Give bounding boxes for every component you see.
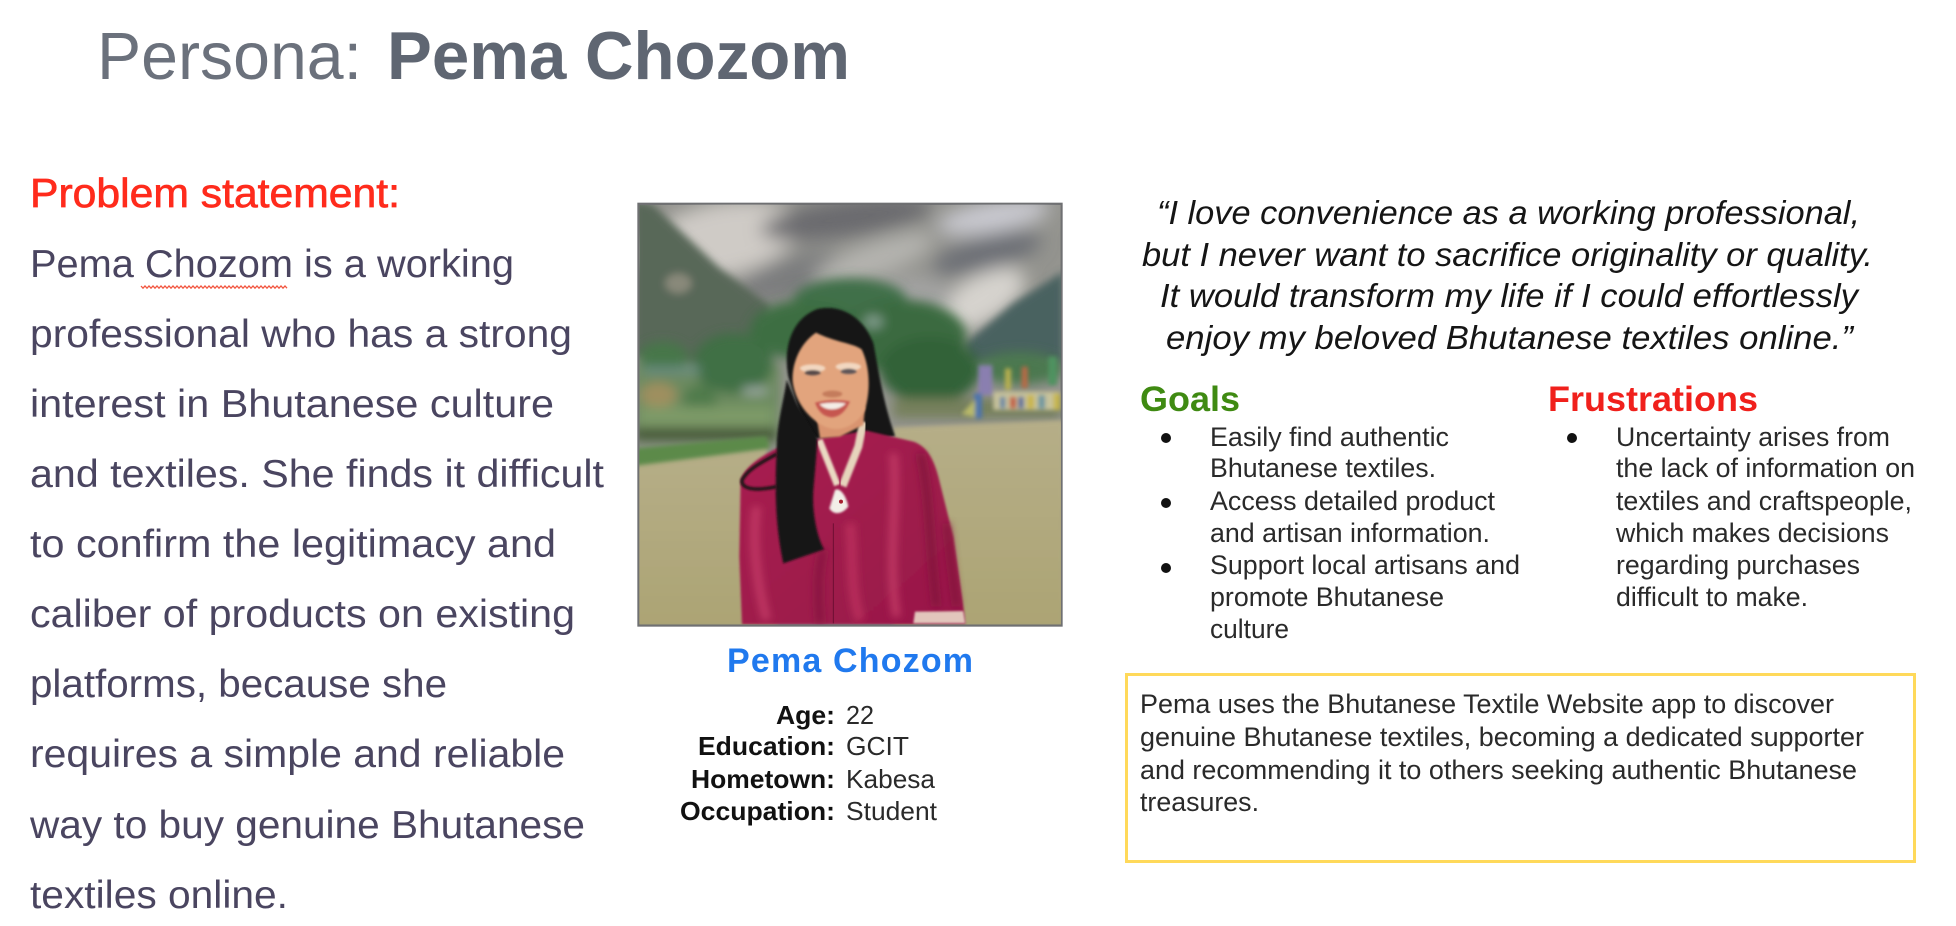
persona details	[680, 700, 938, 826]
persona details: Age:	[776, 700, 835, 730]
panel: goals	[1140, 380, 1520, 644]
problem statement paragraph: and textiles. She finds it difficult	[30, 453, 604, 496]
problem statement paragraph: caliber of products on existing	[30, 593, 575, 636]
persona details: Student	[846, 796, 938, 826]
goals bullet list: promote Bhutanese	[1210, 582, 1444, 612]
mountains	[633, 200, 1063, 367]
collar	[819, 440, 837, 485]
scenario text: treasures.	[1140, 787, 1259, 817]
frustrations bullet list: difficult to make.	[1616, 582, 1808, 612]
portrait photo	[633, 188, 1063, 627]
persona details: Hometown:	[691, 764, 835, 794]
frustrations bullet list	[1567, 422, 1915, 612]
goals bullet list: and artisan information.	[1210, 518, 1490, 548]
scenario text: genuine Bhutanese textiles, becoming a dedicated supporter	[1140, 722, 1864, 752]
cuff	[913, 611, 965, 623]
persona details: GCIT	[846, 731, 909, 761]
front hair strand	[776, 380, 824, 563]
goals bullet list: Bhutanese textiles.	[1210, 453, 1436, 483]
goals bullet list: Access detailed product	[1210, 486, 1496, 516]
problem statement paragraph: textiles online.	[30, 874, 288, 917]
problem statement paragraph	[29, 243, 604, 917]
neck and face	[815, 407, 865, 438]
quote: It would transform my life if I could effortlessly	[1160, 277, 1861, 314]
quote: “I love convenience as a working professional,	[1157, 194, 1860, 231]
scenario text: Pema uses the Bhutanese Textile Website app to discover	[1140, 689, 1834, 719]
frustrations bullet list: the lack of information on	[1616, 453, 1915, 483]
quote: enjoy my beloved Bhutanese textiles online.”	[1166, 319, 1855, 356]
title	[97, 18, 850, 94]
heading: frustrations: Frustrations	[1548, 380, 1758, 419]
robe	[739, 431, 965, 624]
flags and painted wall	[962, 357, 1060, 418]
scenario text	[1140, 689, 1864, 817]
goals bullet list: Support local artisans and	[1210, 550, 1520, 580]
callout: scenario box	[1126, 674, 1914, 862]
quote	[1142, 194, 1873, 356]
persona details: Occupation:	[680, 796, 835, 826]
problem statement paragraph: way to buy genuine Bhutanese	[29, 804, 585, 847]
photo background scenery	[633, 188, 1063, 627]
frustrations bullet list: regarding purchases	[1616, 550, 1860, 580]
goals bullet list: Easily find authentic	[1210, 422, 1449, 452]
heading: problem statement: Problem statement:	[30, 170, 400, 216]
goals bullet list: culture	[1210, 614, 1289, 644]
goals bullet list	[1161, 422, 1520, 644]
frustrations bullet list: which makes decisions	[1615, 518, 1889, 548]
frustrations bullet list: Uncertainty arises from	[1616, 422, 1890, 452]
field	[633, 445, 777, 627]
problem statement paragraph: requires a simple and reliable	[30, 733, 565, 776]
panel: frustrations	[1548, 380, 1915, 612]
persona details: Education:	[698, 731, 835, 761]
trees and distant grounds	[633, 278, 1063, 443]
clouds	[639, 204, 1056, 336]
persona details: 22	[846, 700, 874, 730]
problem statement paragraph: professional who has a strong	[30, 313, 572, 356]
person	[739, 308, 965, 624]
title: Persona:	[97, 19, 362, 94]
title: Pema Chozom	[387, 18, 850, 94]
persona details: Kabesa	[846, 764, 936, 794]
heading: goals: Goals	[1140, 380, 1240, 419]
problem statement paragraph: platforms, because she	[30, 663, 447, 706]
frustrations bullet list: textiles and craftspeople,	[1616, 486, 1912, 516]
scenario text: and recommending it to others seeking authentic Bhutanese	[1140, 755, 1857, 785]
back hair	[787, 308, 895, 443]
problem statement paragraph: Pema Chozom is a working	[30, 243, 514, 286]
problem statement paragraph: interest in Bhutanese culture	[30, 383, 554, 426]
face details	[800, 363, 861, 417]
problem statement paragraph: to confirm the legitimacy and	[30, 523, 556, 566]
quote: but I never want to sacrifice originality or quality.	[1142, 236, 1873, 273]
persona name: Pema Chozom	[727, 642, 973, 680]
panel: problem statement	[29, 170, 604, 917]
spell-check squiggle	[141, 286, 287, 288]
